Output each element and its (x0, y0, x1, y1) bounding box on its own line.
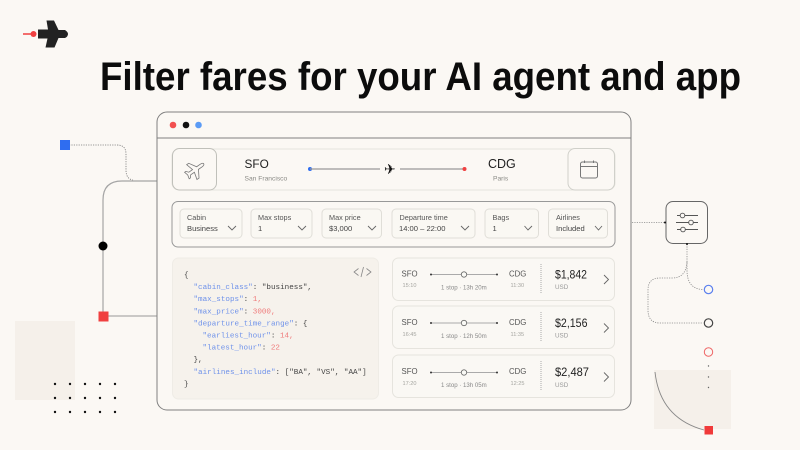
filter: departure time: Departure time (400, 213, 448, 222)
dot grid (54, 383, 116, 413)
filter: max stops: Max stops (258, 213, 292, 222)
route bar: San Francisco (244, 176, 288, 182)
json text: "max_stops": 1, (194, 296, 262, 304)
flight result 1: SFO (402, 270, 418, 278)
icon: code brackets (354, 267, 371, 277)
flight result 2: CDG (509, 318, 526, 327)
flight result 2: 11:35 (510, 332, 524, 338)
filter: departure time (392, 209, 475, 238)
json text: { (184, 272, 189, 280)
flight result 1: 1 stop · 13h 20m (441, 284, 487, 292)
node: blue ring (704, 285, 713, 294)
filter: cabin: Business (187, 224, 218, 233)
title: Filter fares for your AI agent and app (100, 55, 741, 99)
left connectors (69, 145, 157, 316)
json text: "earliest_hour": 14, (202, 332, 294, 340)
logo: plane with red trail (23, 20, 68, 48)
flight result 3: 17:20 (402, 381, 416, 387)
flight result 2: 16:45 (402, 332, 416, 338)
filter: max stops (251, 209, 312, 238)
flight result 2: USD (555, 332, 569, 340)
json text: } (184, 381, 189, 389)
route line (308, 161, 466, 177)
flight result 3: $2,487 (555, 365, 589, 379)
destination: CDG (488, 157, 516, 171)
right connectors (632, 222, 703, 323)
filter: cabin (180, 209, 242, 238)
node: black circle (98, 242, 108, 250)
json text: "airlines_include": ["BA", "VS", "AA"] (194, 369, 367, 377)
flight result 1 (392, 258, 614, 300)
json text: "max_price": 3000, (194, 308, 276, 316)
filter: bags: Bags (492, 213, 509, 222)
json text: }, (194, 356, 203, 364)
flight result 2: SFO (402, 318, 418, 327)
flight result 1: CDG (509, 270, 526, 278)
flight result 1: USD (555, 284, 569, 291)
json text: "departure_time_range": { (194, 320, 307, 328)
dotted vertical dots (708, 365, 709, 388)
route bar (172, 148, 615, 190)
node: blue square (60, 140, 70, 150)
filter: bags: 1 (492, 224, 497, 233)
filter: airlines: Included (556, 224, 585, 233)
flight result 3: CDG (509, 367, 526, 376)
filter: bags (485, 209, 538, 238)
json text (184, 272, 367, 389)
flight result 3: USD (555, 382, 569, 389)
flight result 3: 1 stop · 13h 05m (441, 382, 487, 389)
icon: plane box (172, 148, 216, 190)
node: red square (98, 312, 108, 322)
json text: "latest_hour": 22 (202, 344, 280, 352)
flight result 2: 1 stop · 12h 50m (441, 333, 487, 340)
node: dark ring (704, 319, 713, 327)
json text: "cabin_class": "business", (194, 284, 312, 292)
browser window (157, 112, 631, 410)
icon: calendar box (568, 148, 614, 190)
route line: ✈ (384, 161, 396, 177)
filter: airlines (548, 209, 608, 238)
flight result 3 (392, 355, 614, 398)
flight result 3: SFO (402, 367, 418, 376)
flight result 1: 11:30 (510, 283, 524, 289)
node: red ring (704, 348, 713, 356)
filter: cabin: Cabin (187, 213, 206, 222)
filter: max price (322, 209, 382, 238)
filter panel (172, 202, 615, 247)
curve to red square (655, 372, 704, 430)
decorative background squares (15, 321, 731, 429)
origin: SFO (244, 157, 269, 171)
route bar: Paris (493, 176, 509, 182)
flight result 3: 12:25 (510, 381, 524, 387)
filter: departure time: 14:00 – 22:00 (399, 224, 445, 233)
filter: airlines: Airlines (556, 213, 580, 222)
flight result 2 (392, 306, 614, 348)
window control dots (170, 122, 202, 128)
flight result 2: $2,156 (555, 316, 588, 330)
code panel (172, 258, 378, 399)
filter: max price: $3,000 (329, 224, 352, 233)
filter: max price: Max price (329, 213, 361, 222)
filter settings icon (664, 202, 708, 245)
filter: max stops: 1 (258, 224, 262, 233)
node: red square bottom (704, 426, 713, 434)
flight result 1: $1,842 (555, 268, 587, 282)
flight result 1: 15:10 (402, 283, 416, 289)
